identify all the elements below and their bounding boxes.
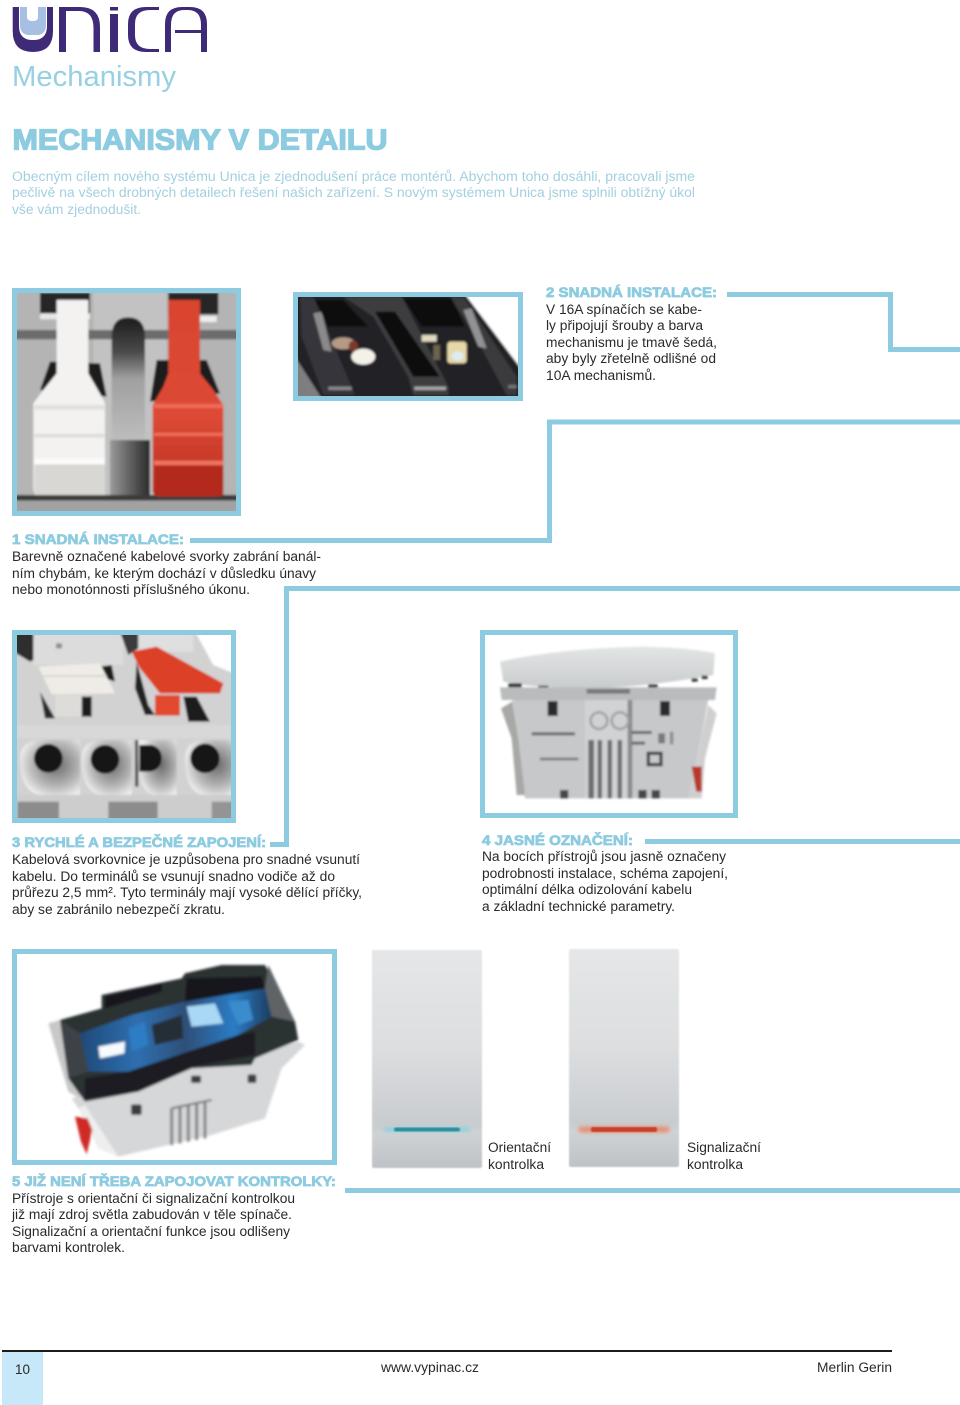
intro text: vše vám zjednodušit. xyxy=(12,202,141,218)
footer rule xyxy=(2,1350,892,1352)
switch with blue orientation light xyxy=(372,950,482,1168)
section 4 text: 4 JASNÉ OZNAČENÍ: xyxy=(482,831,633,848)
label: signalling light: Signalizační xyxy=(687,1140,761,1156)
section 1 text: ním chybám, ke kterým dochází v důsledku únavy xyxy=(12,566,317,582)
section 4 text: podrobnosti instalace, schéma zapojení, xyxy=(482,866,728,882)
page number tab: 10 xyxy=(15,1362,30,1378)
section 5 text: barvami kontrolek. xyxy=(12,1240,125,1256)
section 1 text: nebo monotónnosti příslušného úkonu. xyxy=(12,582,250,598)
section 5 text: Signalizační a orientační funkce jsou odlišeny xyxy=(12,1224,291,1240)
photo 2: dark mechanism with screws xyxy=(290,288,527,405)
connector line: section 1 xyxy=(190,422,960,540)
label: orientation light: Orientační xyxy=(488,1140,551,1156)
label: signalling light: kontrolka xyxy=(687,1157,743,1173)
section 4 text: optimální délka odizolování kabelu xyxy=(482,882,692,898)
section 5 text: Přístroje s orientační či signalizační kontrolkou xyxy=(12,1191,295,1207)
logo: Unica xyxy=(13,7,207,52)
intro text: Obecným cílem nového systému Unica je zjednodušení práce montérů. Abychom toho dosáhli, pracovali jsme xyxy=(12,169,695,185)
subtitle: Mechanismy: Mechanismy xyxy=(12,61,176,93)
photo 5: mechanism with indicator light xyxy=(14,952,334,1162)
section 3 text: Kabelová svorkovnice je uzpůsobena pro snadné vsunutí xyxy=(12,852,360,868)
section 4 text: Na bocích přístrojů jsou jasně označeny xyxy=(482,849,727,865)
section 2 text: V 16A spínačích se kabe- xyxy=(546,302,702,318)
footer website: www.vypinac.cz xyxy=(380,1360,479,1376)
connector line: section 3 xyxy=(270,588,960,844)
section 2 text: mechanismu je tmavě šedá, xyxy=(546,335,717,351)
intro text: pečlivě na všech drobných detailech řešení našich zařízení. S novým systémem Unica jsme splnili obtížný úkol xyxy=(12,185,695,201)
section 2 text: 10A mechanismů. xyxy=(546,368,656,384)
switch with red signalling light xyxy=(569,949,679,1167)
section 1 text xyxy=(12,531,321,598)
intro text xyxy=(12,169,695,218)
main heading: MECHANISMY V DETAILU xyxy=(12,124,388,156)
section 4 text: a základní technické parametry. xyxy=(482,899,675,915)
section 5 text xyxy=(11,1172,336,1256)
section 3 text: 3 RYCHLÉ A BEZPEČNÉ ZAPOJENÍ: xyxy=(12,833,266,850)
section 3 text: průřezu 2,5 mm². Tyto terminály mají vysoké dělící příčky, xyxy=(12,885,362,901)
section 5 text: již mají zdroj světla zabudován v těle spínače. xyxy=(11,1207,292,1223)
section 3 text: kabelu. Do terminálů se vsunují snadno vodiče až do xyxy=(12,869,335,885)
page number tab xyxy=(2,1352,43,1405)
label: orientation light: kontrolka xyxy=(488,1157,544,1173)
connector line: section 2 xyxy=(727,294,960,350)
label: signalling light xyxy=(687,1140,761,1173)
connector line: section 4 xyxy=(645,839,960,844)
photo 1: white and red cable clamps xyxy=(10,285,240,518)
label: orientation light xyxy=(488,1140,551,1173)
section 2 text: 2 SNADNÁ INSTALACE: xyxy=(546,284,717,300)
section 3 text: aby se zabránilo nebezpečí zkratu. xyxy=(12,902,225,918)
section 3 text xyxy=(12,833,362,918)
section 1 text: Barevně označené kabelové svorky zabrání banál- xyxy=(12,549,321,565)
section 2 text xyxy=(546,284,717,384)
section 2 text: aby byly zřetelně odlišné od xyxy=(546,351,716,367)
section 4 text xyxy=(482,831,728,915)
connector line: section 5 xyxy=(345,1188,960,1193)
photo 4: switch mechanism side view xyxy=(482,632,736,816)
photo 3: cable terminal block xyxy=(10,627,238,827)
section 1 text: 1 SNADNÁ INSTALACE: xyxy=(12,531,184,547)
footer brand: Merlin Gerin xyxy=(817,1360,892,1376)
section 2 text: ly připojují šrouby a barva xyxy=(546,318,703,334)
section 5 text: 5 JIŽ NENÍ TŘEBA ZAPOJOVAT KONTROLKY: xyxy=(12,1172,336,1189)
